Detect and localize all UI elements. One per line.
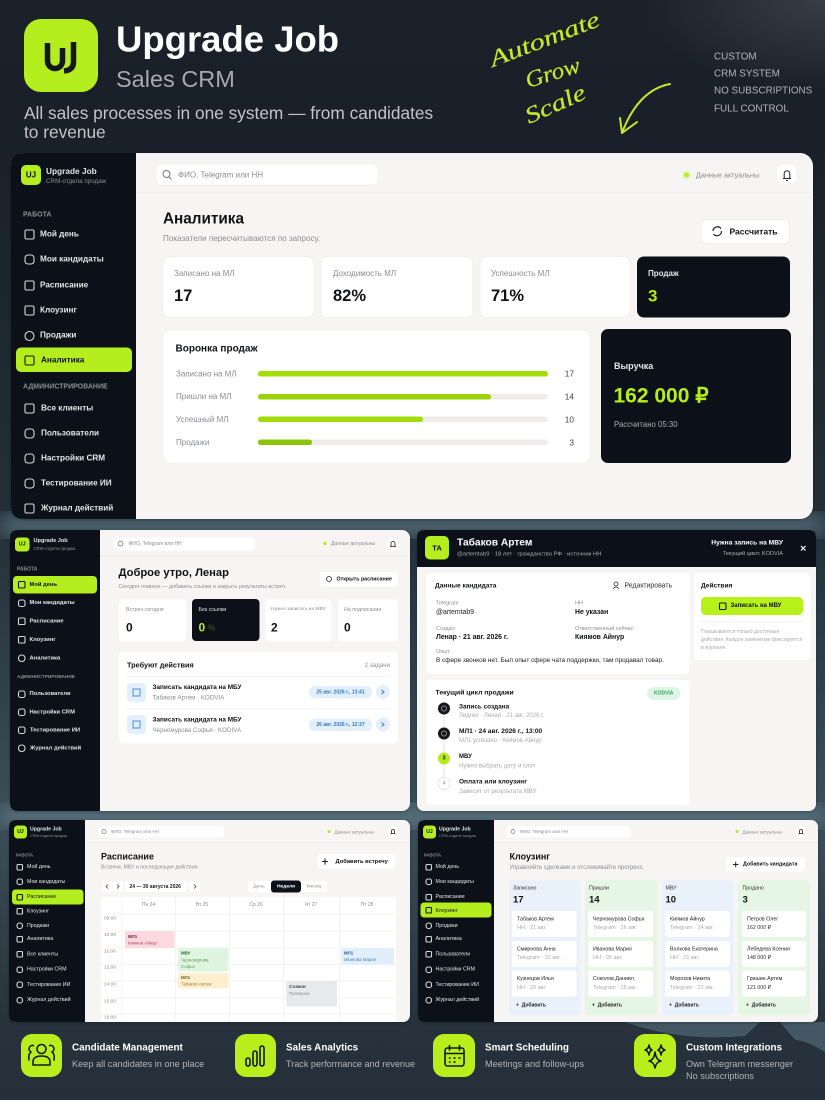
event: МВУ [181,950,191,956]
event [286,981,337,1006]
feature: custom integrations: Own Telegram messenger [686,1059,793,1069]
calendar: Пн 24 [142,902,155,908]
task row 2: Черномурова Софья · KODIVA [152,727,242,734]
funnel chart: Воронка продаж [176,344,258,354]
task row 1: 25 авг. 2026 г., 13:41 [316,690,365,696]
handwritten slogan: Grow [522,52,584,93]
column: came: Соколов Даниил [593,976,634,982]
feature: sales analytics: Sales Analytics [286,1042,359,1054]
calendar: Чт 27 [305,902,318,908]
sidebar: Клоузинг [40,306,77,314]
subtitle: Sales CRM [116,66,235,92]
subheading: Встречи, МВУ и последующие действия. [101,864,199,870]
date navigation [102,881,200,892]
panel: closing screen [418,820,818,1022]
sidebar: CRM-отдела продаж [46,178,107,185]
sale cycle card: Нужно выбрать дату и слот [459,764,536,770]
candidate data card [426,573,690,674]
sidebar: Тестирование ИИ [41,478,112,488]
actions card [694,573,810,660]
sidebar: Тестирование ИИ [27,982,71,988]
sidebar: Upgrade Job [46,166,97,176]
feature list: CRM SYSTEM [714,68,780,80]
feature: candidate management: Keep all candidates in one place [72,1059,204,1069]
sidebar: CRM-отдела продаж [439,833,476,838]
sidebar: РАБОТА [23,212,51,218]
sale cycle card: 3 [442,756,446,762]
sidebar: Все клиенты [27,952,58,958]
candidate data card: В сфере звонков нет. Был опыт сфере чата поддержки, там продавал товар. [436,657,664,664]
view tabs: День [253,884,265,890]
sale cycle card: 4 [442,781,446,787]
status and bell: Данные актуальны [696,170,759,180]
stat cards: 17 [174,287,192,305]
button [701,220,790,244]
sidebar: Журнал действий [27,996,71,1003]
tasks panel: 2 задачи [365,662,390,669]
logo [24,19,98,92]
funnel chart: Успешный МЛ [176,415,229,424]
calendar: Ср 26 [249,902,263,908]
sidebar: Мои кандидаты [40,254,104,264]
column: recorded: HH · 21 авг. [517,925,547,931]
stat cards: % [208,624,215,632]
column: recorded [509,880,580,1016]
sidebar: Аналитика [27,936,53,942]
candidate data card: Ленар · 21 авг. 2026 г. [436,634,508,641]
sale cycle card: KODVIA [654,690,674,696]
column: came: Telegram · 25 авг. [593,985,637,991]
sidebar: Мои кандидаты [27,879,66,885]
subheading: Сегодня главное — добавить ссылки и закрыть результаты встреч. [118,584,287,590]
column: recorded: HH · 20 авг. [517,985,547,991]
column: sold: Гришин Артем [747,976,783,982]
stat cards: На подписании [344,607,381,613]
tasks panel [119,652,398,744]
button: Добавить кандидата [743,860,797,868]
tagline: All sales processes in one system — from candidates [24,103,434,123]
sidebar: Upgrade Job [34,538,68,544]
feature: custom integrations: Custom Integrations [686,1042,783,1054]
arrow [620,84,670,133]
sidebar: Настройки CRM [30,708,75,716]
panel: candidate card screen [417,530,816,811]
funnel chart [163,330,590,463]
heading: Клоузинг [510,852,550,862]
candidate data card: Опыт [436,649,450,655]
calendar: 09:00 [104,916,116,922]
event [178,948,228,972]
column: recorded: Telegram · 20 авг. [517,955,561,961]
sale cycle card: МВУ [459,754,472,760]
sidebar: Мой день [436,863,459,870]
column: mvu: Волкова Екатерина [670,946,718,952]
sidebar: Пользователи [30,691,71,697]
column: sold: + Добавить [746,1002,776,1008]
candidate data card: Киямов Айнур [575,633,624,641]
task row 1: Записать кандидата на МБУ [152,684,242,691]
candidate header: ТА [432,544,442,552]
column: recorded: Смирнова Анна [517,946,556,952]
feature list: CUSTOM [714,52,757,62]
funnel chart: 17 [565,368,574,378]
event [341,948,394,965]
sidebar: CRM-отдела продаж [34,546,75,551]
sidebar: Журнал действий [436,996,479,1003]
sale cycle card: МЛ1 · 24 авг. 2026 г., 13:00 [459,728,543,735]
sidebar: Аналитика [436,936,462,942]
event: Софья [181,964,196,969]
handwritten slogan: Scale [521,80,590,129]
sale cycle card: Запись создана [459,704,510,710]
view tabs: Месяц [307,884,322,890]
stat cards: 82% [333,287,366,305]
tagline: to revenue [24,122,106,142]
column: recorded: Табаков Артем [517,916,554,922]
heading: Доброе утро, Ленар [118,567,229,579]
sidebar: Мой день [30,581,57,588]
feature: smart scheduling: Smart Scheduling [485,1042,569,1054]
button: Добавить встречу [336,858,389,865]
calendar: 10:00 [104,932,116,938]
event [125,931,174,948]
sidebar [418,820,494,1022]
view tabs [248,880,327,892]
calendar: Вт 25 [196,902,208,908]
candidate data card: Создал [436,626,455,632]
column: sold: 148 000 ₽ [747,955,772,961]
stat cards: 71% [491,287,524,305]
button [320,572,398,586]
stat cards: Продаж [648,269,679,278]
sidebar: Тестирование ИИ [30,728,80,734]
event: Киямов Айнур [128,940,157,946]
panel: schedule screen [9,820,410,1022]
sidebar: Пользователи [41,428,99,438]
column: mvu: Киямов Айнур [670,916,705,922]
top bar: Данные актуальны [334,829,374,834]
sidebar: Журнал действий [29,744,82,752]
actions card: Действия [701,582,733,590]
sidebar: Настройки CRM [27,966,67,972]
task row 2 [127,715,390,734]
panel: my day screen [10,530,410,811]
event: Табаков Артем [181,982,211,986]
column: sold: 162 000 ₽ [747,925,772,931]
column: came: Иванова Мария [593,946,632,952]
feature: candidate management [21,1034,204,1077]
funnel chart: 10 [565,414,574,424]
event: МЛ1 [344,950,354,956]
subheading: Управляйте сделками и отслеживайте прогресс. [510,864,644,871]
handwritten slogan [483,7,603,129]
actions card: действия. Каждое изменение фиксируется [701,636,802,643]
top bar: Данные актуальны [331,541,375,547]
calendar [101,897,396,1022]
event: Иванова Мария [344,957,377,962]
sale cycle card: Зависит от результата МВУ [459,788,537,795]
sidebar: АДМИНИСТРИРОВАНИЕ [17,674,76,680]
sidebar: Клоузинг [436,908,458,914]
stat cards: Встреч сегодня [126,607,164,613]
candidate header: Табаков Артем [457,536,532,548]
calendar: Пт 28 [361,902,374,908]
event: Черномурова [181,958,209,962]
button [726,857,804,872]
sidebar: UJ [19,542,26,548]
column: came: HH · 25 авг. [593,955,623,961]
handwritten slogan: Automate [483,7,603,73]
top bar: ФИО, Telegram или HH [128,541,182,547]
task row 1: Табаков Артем · KODVIA [152,694,225,702]
sidebar [9,820,85,1022]
sidebar: UJ [26,170,36,180]
heading: Расписание [101,852,154,862]
feature: sales analytics: Track performance and revenue [286,1059,415,1069]
sidebar: Мои кандидаты [436,879,474,885]
sidebar: Аналитика [30,656,61,662]
calendar: 16:00 [104,1014,116,1020]
column: recorded: 17 [513,894,524,906]
sidebar: Пользователи [436,952,470,958]
stat cards: Успешность МЛ [491,269,550,278]
calendar: 12:00 [104,964,116,970]
event: МЛ1 [181,975,191,980]
revenue card: 162 000 ₽ [614,384,709,408]
sidebar: Мой день [40,230,79,238]
column: mvu: Морозов Никита [670,976,710,982]
stat cards [119,599,398,642]
actions card: в журнале. [701,645,727,651]
column: recorded: Кузнецов Илья [517,976,554,982]
funnel chart: Пришли на МЛ [176,392,231,401]
icon: people [21,1034,62,1077]
funnel chart: 14 [565,392,574,402]
stat cards: 3 [648,286,657,306]
sale cycle card: Оплата или клоузинг [459,778,527,786]
column: came: Telegram · 26 авг. [593,925,637,931]
column: sold: Петров Олег [747,916,778,922]
task row 1 [127,683,390,702]
stat cards [163,256,790,318]
candidate data card: HH [575,600,583,606]
icon: calendar [433,1034,475,1077]
subheading: Показатели пересчитываются по запросу. [163,234,320,243]
icon: bar chart [235,1034,276,1077]
feature list: NO SUBSCRIPTIONS [714,86,813,96]
column: came [585,880,657,1016]
task row 2: Записать кандидата на МБУ [152,716,242,724]
column: came: Черномурова Софья [593,916,645,922]
column: recorded: + Добавить [516,1002,546,1008]
event: Созвон [289,984,306,989]
revenue card: Выручка [614,361,654,371]
event: Проверка [289,991,310,996]
sidebar: UJ [17,829,24,835]
sidebar: Тестирование ИИ [436,982,479,988]
candidate header: @artemtab9 · 18 лет · гражданство РФ · источник HH [457,552,602,558]
candidate data card: Telegram [436,600,459,606]
sidebar: АДМИНИСТРИРОВАНИЕ [23,384,108,390]
feature: custom integrations [634,1034,793,1081]
column: came: Пришли [589,886,609,892]
feature: smart scheduling [433,1034,584,1077]
sidebar [10,530,100,811]
sidebar: Расписание [436,894,465,900]
sidebar: РАБОТА [17,566,38,572]
stat cards: 2 [271,620,278,634]
column: mvu: МВУ [666,886,677,892]
button [318,854,396,869]
sidebar: Настройки CRM [41,454,105,462]
sidebar: Расписание [30,618,64,624]
sidebar: Продажи [27,923,49,929]
column: sold: 3 [742,894,748,906]
candidate header: Текущий цикл: KODVIA [723,550,783,557]
search bar: ФИО, Telegram или HH [178,170,263,180]
sale cycle card: Текущий цикл продажи [436,688,514,696]
calendar: 15:00 [104,998,116,1004]
revenue card: Рассчитано 05:30 [614,420,678,429]
column: came: + Добавить [592,1002,622,1008]
column: sold [738,880,810,1016]
search bar [136,164,813,192]
column: recorded: Записано [513,886,536,892]
sidebar: РАБОТА [16,852,33,858]
feature: smart scheduling: Meetings and follow-ups [485,1059,584,1069]
top bar [85,826,410,842]
tagline [24,103,434,142]
candidate data card: Редактировать [624,582,673,590]
column: mvu [662,880,733,1016]
heading: Аналитика [163,210,244,228]
candidate header [417,530,816,567]
sidebar: Upgrade Job [30,826,62,832]
candidate header: Нужна запись на МВУ [711,540,784,546]
column: mvu: Telegram · 22 авг. [670,985,714,991]
candidate data card: Данные кандидата [435,582,497,590]
button: Открыть расписание [336,576,392,582]
column: came: 14 [589,894,600,906]
stat cards: 0 [344,620,351,634]
sale cycle card: МЛ1 успешно · Киямов Айнур [459,737,542,744]
column: mvu: HH · 23 авг. [670,955,700,961]
feature: candidate management: Candidate Management [72,1042,184,1054]
candidate data card: Не указан [575,609,608,616]
sidebar: РАБОТА [424,852,441,858]
panel: analytics screen [11,153,813,519]
button: Рассчитать [730,226,777,236]
calendar: 11:00 [104,948,116,954]
title: Upgrade Job [116,18,339,60]
stat cards: Без ссылки [198,607,226,613]
revenue card [601,329,791,463]
tasks panel: Требуют действия [127,660,194,670]
column: mvu: Telegram · 24 авг. [670,925,714,931]
stat cards: Записано на МЛ [174,269,235,278]
feature list [714,52,813,114]
top bar: Данные актуальны [742,829,782,834]
event: МЛ1 [128,934,138,939]
feature: sales analytics [235,1034,415,1077]
sidebar: Журнал действий [40,504,113,512]
sale cycle card: Лидген · Ленар · 21 авг. 2026 г. [459,713,545,719]
sidebar: Все клиенты [41,404,93,412]
funnel chart: 3 [569,438,574,448]
sidebar: Расписание [40,280,89,290]
status and bell [682,165,796,184]
candidate data card: @artemtab9 [436,609,474,616]
top bar [494,826,818,842]
icon: sparkles [634,1034,676,1077]
column: sold: 121 000 ₽ [747,985,772,991]
candidate data card: Ответственный сейчас [575,625,634,632]
column: mvu: 10 [666,894,676,906]
sidebar: Upgrade Job [439,826,471,832]
sidebar: Продажи [436,923,458,929]
column: sold: Лебедева Ксения [747,946,790,952]
column: mvu: + Добавить [669,1002,699,1008]
actions card: Записать на МВУ [730,603,782,609]
actions card: Показываются только доступные [701,629,779,635]
funnel chart: Продажи [176,438,209,447]
sidebar: Мой день [27,863,51,870]
column: sold: Продано [742,886,764,892]
task row 2: 26 авг. 2026 г., 12:37 [316,722,365,728]
stat cards: 0 [198,620,206,634]
event [178,973,228,988]
top bar: ФИО, Telegram или HH [520,829,568,834]
stat cards: Доходимость МЛ [333,269,396,278]
stat cards: Нужно записать на МВУ [271,606,327,612]
sidebar: Продажи [40,330,76,340]
feature: custom integrations: No subscriptions [686,1071,754,1081]
sidebar: Расписание [27,894,56,900]
sidebar: Мои кандидаты [30,600,75,606]
calendar: 14:00 [104,982,116,988]
sidebar: Клоузинг [30,637,56,643]
view tabs: Неделя [277,883,295,889]
top bar [100,538,410,556]
sidebar: UJ [426,829,433,835]
date navigation: 24 — 30 августа 2026 [130,884,181,890]
sidebar: Аналитика [41,356,85,364]
sidebar: CRM-отдела продаж [30,833,67,838]
sidebar: Настройки CRM [436,966,475,972]
sale cycle card [426,680,690,805]
top bar: ФИО, Telegram или HH [111,829,159,834]
stat cards: 0 [126,620,133,634]
sidebar: Клоузинг [27,908,49,914]
funnel chart: Записано на МЛ [176,370,237,378]
feature list: FULL CONTROL [714,104,789,114]
sidebar [11,153,136,519]
